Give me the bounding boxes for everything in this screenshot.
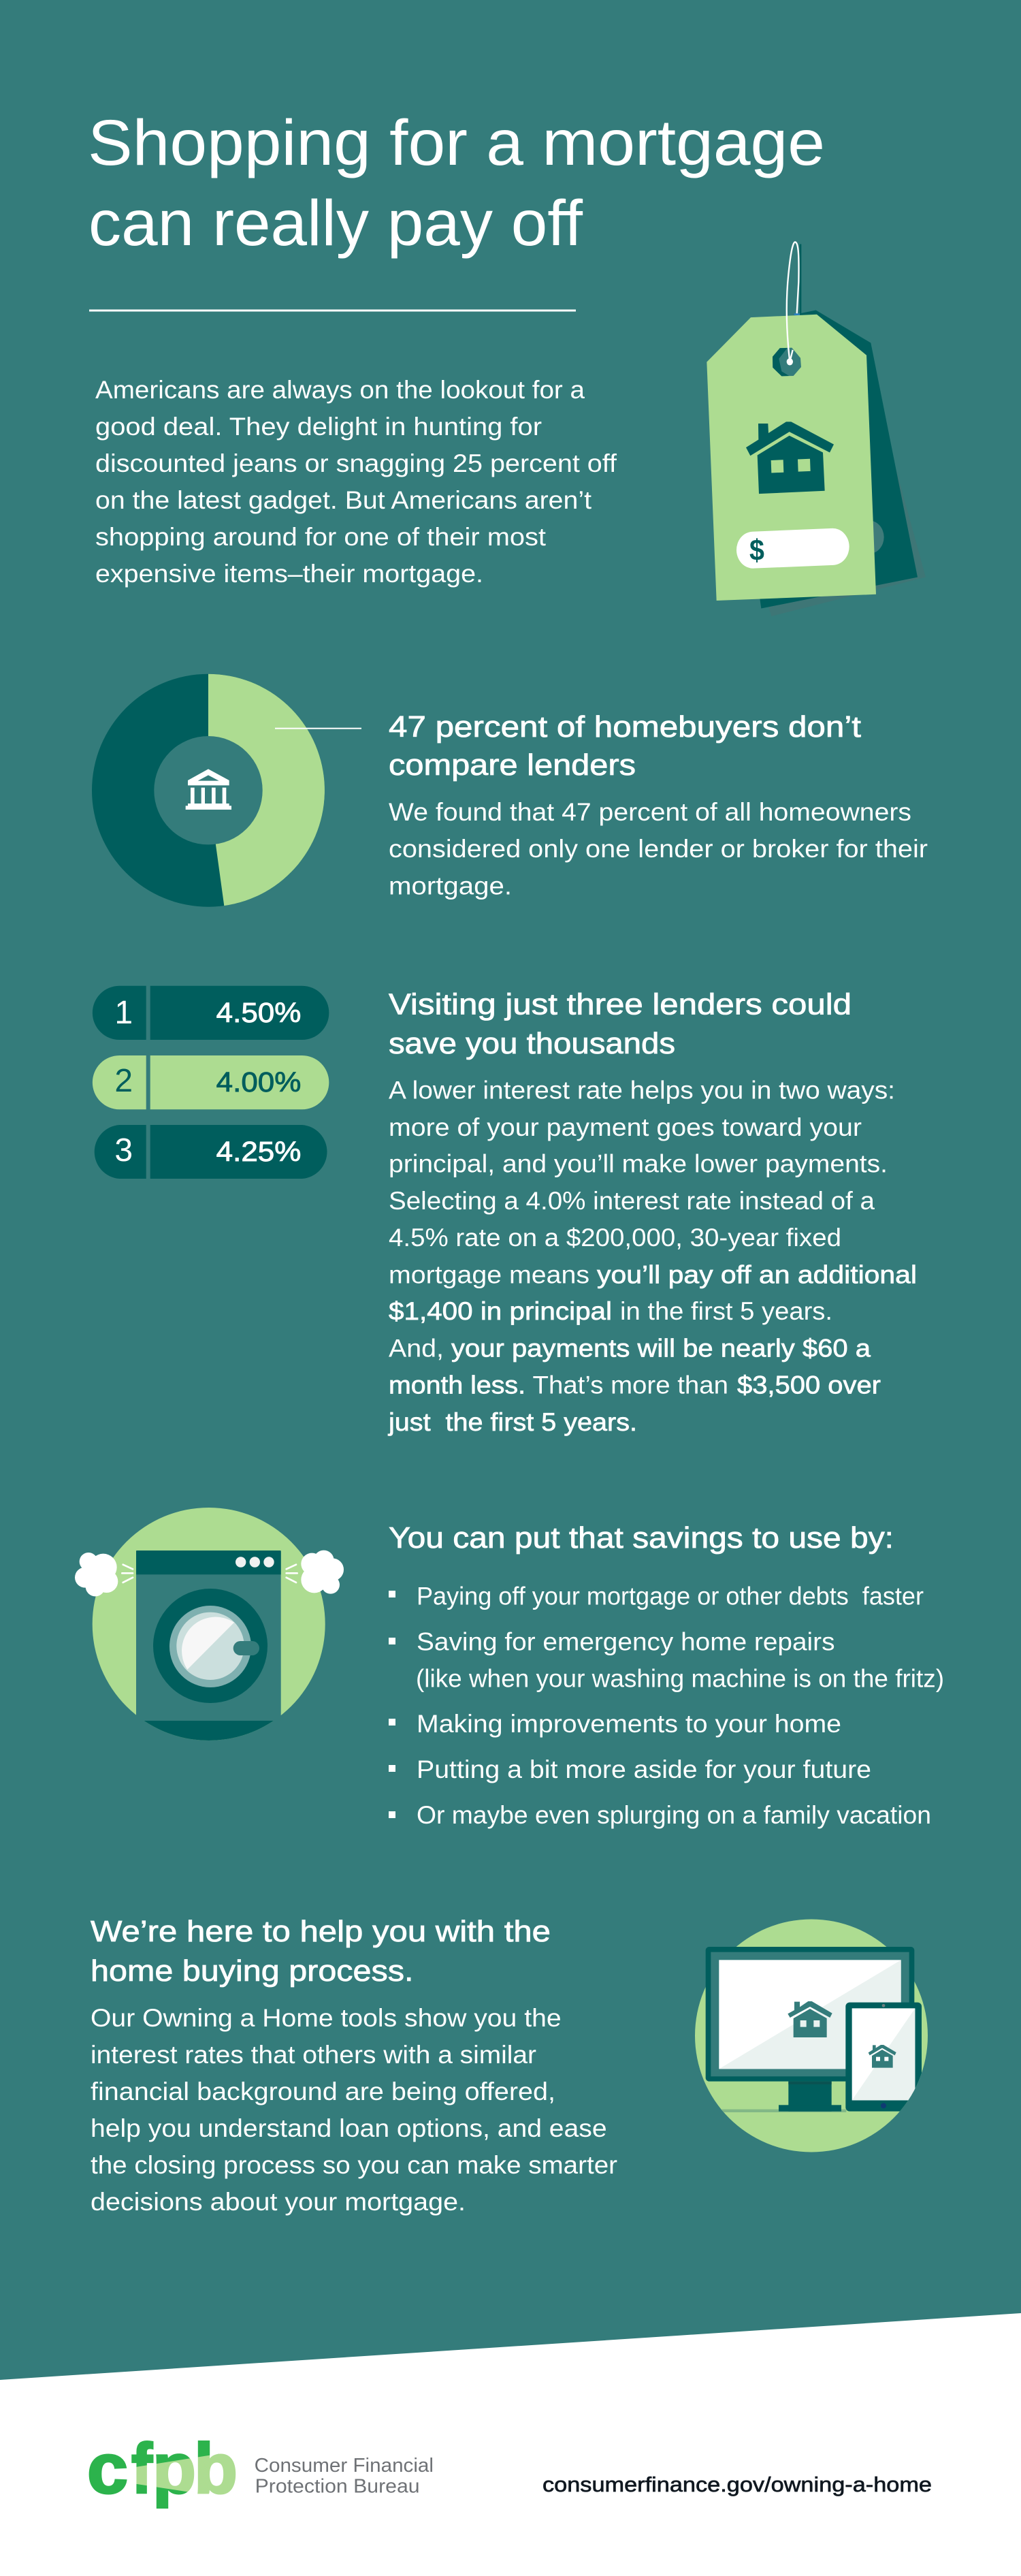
title: can really pay off — [88, 187, 583, 259]
title: Shopping for a mortgage — [88, 107, 825, 179]
title — [88, 107, 825, 259]
section: here to help text: the closing process so you can make smarter — [91, 2151, 617, 2179]
section: 47 percent text: compare lenders — [389, 748, 636, 782]
list item 2: (like when your washing machine is on the fritz) — [416, 1665, 944, 1693]
pill 1 — [93, 986, 329, 1040]
section: visiting three lenders text: Visiting just three lenders could — [389, 987, 852, 1021]
section: here to help text: We’re here to help you with the — [91, 1915, 551, 1948]
icon: price tag: $ — [749, 533, 764, 567]
pill 3 — [95, 1125, 327, 1179]
section: visiting three lenders text: in the first 5 years. — [620, 1297, 832, 1325]
pill 2: 4.00% — [216, 1066, 301, 1098]
section: here to help text: home buying process. — [91, 1954, 414, 1988]
section: visiting three lenders text: your payments will be nearly $60 a — [451, 1335, 871, 1362]
section: visiting three lenders text: you’ll pay off an additional — [597, 1261, 917, 1288]
list item 2 — [389, 1628, 944, 1693]
intro text block — [95, 376, 617, 588]
intro text block: good deal. They delight in hunting for — [95, 413, 542, 441]
intro text block: discounted jeans or snagging 25 percent off — [95, 449, 617, 477]
section: visiting three lenders text: 4.5% rate on a $200,000, 30-year fixed — [389, 1224, 841, 1252]
section: visiting three lenders text: That’s more than — [532, 1371, 728, 1399]
section: here to help text: help you understand loan options, and ease — [91, 2114, 607, 2142]
section: 47 percent text — [389, 710, 928, 900]
intro text block: on the latest gadget. But Americans aren’t — [95, 486, 592, 514]
section: visiting three lenders text — [388, 987, 917, 1436]
section: here to help text: decisions about your mortgage. — [91, 2188, 466, 2216]
section: visiting three lenders text: more of your payment goes toward your — [389, 1113, 862, 1141]
section: visiting three lenders text: mortgage means — [389, 1261, 589, 1288]
logo: bureau name — [255, 2455, 434, 2498]
pill 3: 4.25% — [216, 1136, 301, 1167]
section: 47 percent text: considered only one lender or broker for their — [389, 835, 928, 863]
list item 1: Paying off your mortgage or other debts faster — [417, 1583, 924, 1610]
icon: price tag — [707, 242, 926, 616]
list item 5: Or maybe even splurging on a family vacation — [417, 1801, 931, 1829]
section: 47 percent text: mortgage. — [389, 872, 512, 900]
pill 1: 4.50% — [216, 997, 301, 1028]
section: visiting three lenders text: A lower interest rate helps you in two ways: — [389, 1076, 895, 1104]
list item 4: Putting a bit more aside for your future — [417, 1755, 871, 1783]
section: here to help text — [91, 1915, 617, 2216]
logo: bureau name: Consumer Financial — [255, 2455, 434, 2477]
section: 47 percent text: 47 percent of homebuyers don’t — [389, 710, 861, 744]
logo: cfpb wordmark: p — [152, 2430, 196, 2509]
icon: washing machine — [75, 1508, 344, 1748]
intro text block: expensive items–their mortgage. — [95, 560, 483, 588]
list item 3: Making improvements to your home — [417, 1710, 841, 1738]
logo: bureau name: Protection Bureau — [255, 2476, 420, 2498]
section: savings list: You can put that savings to use by: — [389, 1521, 894, 1555]
pill 1: 1 — [114, 995, 133, 1031]
list item 2: Saving for emergency home repairs — [417, 1628, 834, 1656]
section: 47 percent text: We found that 47 percent of all homeowners — [389, 798, 911, 826]
pill 2 — [93, 1055, 329, 1109]
intro text block: Americans are always on the lookout for a — [95, 376, 585, 404]
section: here to help text: financial background are being offered, — [91, 2078, 555, 2105]
section: visiting three lenders text: just the first 5 years. — [388, 1408, 637, 1436]
section: visiting three lenders text: principal, and you’ll make lower payments. — [389, 1149, 888, 1178]
rate pills — [93, 986, 329, 1179]
icon: monitor and tablet — [695, 1919, 928, 2152]
section: visiting three lenders text: Selecting a 4.0% interest rate instead of a — [389, 1187, 875, 1215]
website url: consumerfinance.gov/owning-a-home — [542, 2472, 932, 2496]
footer band — [0, 2313, 1021, 2576]
section: visiting three lenders text: month less. — [389, 1371, 525, 1399]
donut chart: 47 percent — [92, 674, 361, 907]
pill 3: 3 — [114, 1132, 133, 1168]
logo: cfpb wordmark — [87, 2430, 238, 2509]
logo: cfpb wordmark: c — [87, 2430, 128, 2509]
right steam cloud — [287, 1551, 344, 1594]
section: visiting three lenders text: $3,500 over — [737, 1371, 881, 1399]
section: visiting three lenders text: And, — [389, 1335, 444, 1362]
left steam cloud — [75, 1553, 133, 1596]
logo: cfpb wordmark: f — [131, 2430, 152, 2509]
section: visiting three lenders text: save you thousands — [389, 1027, 675, 1060]
section: here to help text: Our Owning a Home tools show you the — [91, 2004, 562, 2032]
section: savings list — [389, 1521, 944, 1829]
icon: bank — [186, 769, 231, 810]
logo: cfpb wordmark: b — [194, 2430, 238, 2509]
section: visiting three lenders text: $1,400 in principal — [389, 1297, 612, 1325]
pill 2: 2 — [114, 1063, 133, 1099]
section: here to help text: interest rates that others with a similar — [91, 2041, 536, 2069]
intro text block: shopping around for one of their most — [95, 523, 547, 551]
